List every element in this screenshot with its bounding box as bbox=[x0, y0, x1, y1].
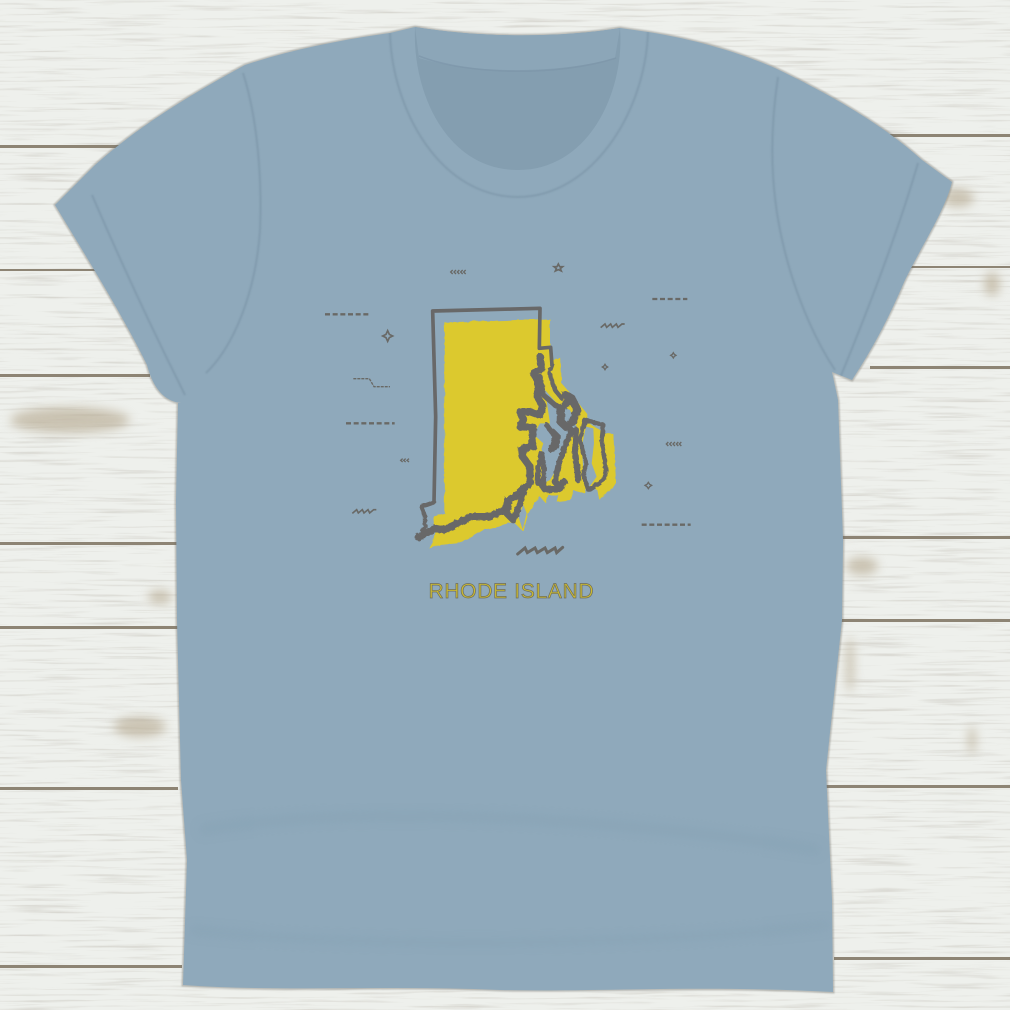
collar inner bbox=[415, 27, 620, 170]
bay water bbox=[534, 390, 577, 483]
north and west border bbox=[422, 308, 552, 517]
state outline bbox=[418, 308, 606, 537]
zigzags bbox=[352, 324, 625, 513]
back collar band bbox=[426, 28, 612, 36]
mid bay blob bbox=[555, 430, 572, 482]
star bbox=[554, 264, 563, 271]
chevrons bbox=[401, 270, 681, 462]
yellow state fill bbox=[429, 319, 616, 548]
Aquidneck east shore bbox=[575, 430, 578, 480]
second shore bbox=[540, 377, 562, 408]
large zigzag bbox=[518, 547, 563, 554]
Conanicut island bbox=[538, 453, 544, 483]
eastern shore bbox=[580, 420, 606, 490]
dashed lines bbox=[325, 299, 691, 525]
south coast loop bbox=[507, 492, 523, 520]
title: RHODE ISLAND: RHODE ISLAND bbox=[428, 580, 594, 603]
decorative marks bbox=[325, 264, 691, 554]
lower bay shore bbox=[540, 482, 564, 489]
fabric folds bbox=[190, 816, 830, 943]
diamonds bbox=[383, 331, 393, 341]
Rhode Island map artwork bbox=[325, 264, 691, 554]
coast detail bbox=[418, 357, 606, 537]
mainland coast bbox=[418, 357, 543, 537]
Prudence island bbox=[547, 425, 558, 450]
stepped dash line bbox=[353, 379, 390, 387]
southwest corner bbox=[418, 502, 434, 537]
upper bay blob bbox=[561, 395, 577, 427]
river shore bbox=[549, 365, 562, 398]
